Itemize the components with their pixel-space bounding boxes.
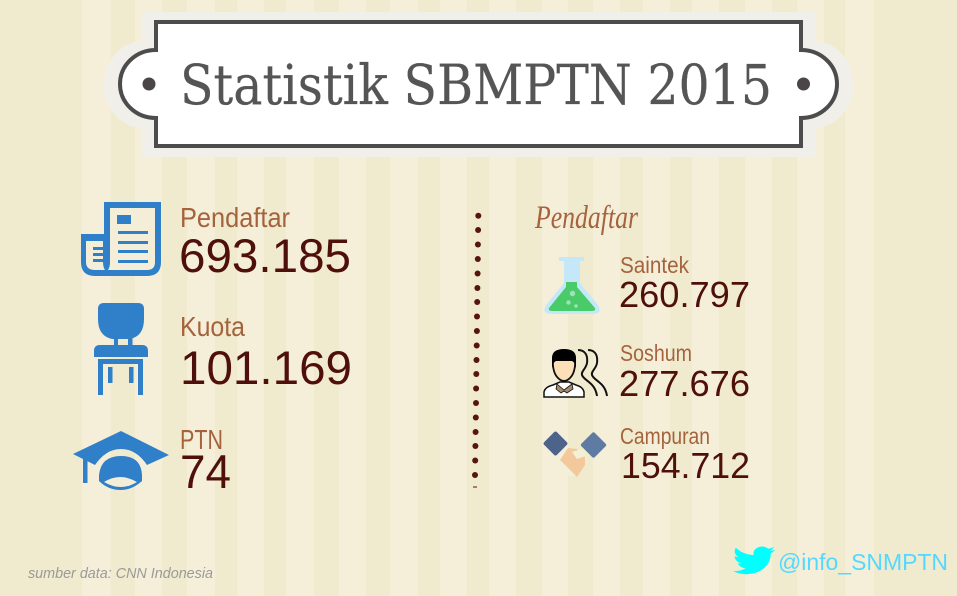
stat: kuota: [94, 303, 352, 395]
number: 260.797: 260.797: [619, 274, 750, 315]
number: 101.169: 101.169: [180, 341, 352, 394]
banner left dot: [142, 78, 156, 90]
number: 693.185: 693.185: [179, 229, 351, 282]
label: Campuran: Campuran: [620, 423, 710, 449]
icon: newspaper: [81, 202, 161, 276]
handwritten heading: Pendaftar: Pendaftar: [534, 200, 638, 236]
icon: graduation cap: [73, 431, 169, 490]
icon: people: [544, 349, 607, 397]
label: Pendaftar: Pendaftar: [180, 202, 290, 233]
label: Saintek: Saintek: [620, 252, 689, 278]
number: 74: 74: [180, 445, 231, 498]
icon: chair: [94, 303, 148, 395]
twitter handle: [733, 546, 948, 575]
title text: Statistik SBMPTN 2015: [180, 53, 772, 117]
icon: handshake: [543, 431, 607, 477]
number: 277.676: 277.676: [619, 363, 750, 404]
label: Soshum: Soshum: [620, 340, 692, 366]
icon: twitter bird: [733, 546, 775, 574]
banner right dot: [797, 78, 810, 90]
label: Kuota: Kuota: [180, 311, 245, 342]
stat: pendaftar: [81, 202, 351, 282]
stat: campuran: [543, 423, 750, 486]
icon: flask: [544, 257, 600, 314]
banner plaque: [120, 22, 837, 146]
dotted divider: [472, 213, 481, 487]
handle text: @info_SNMPTN: [778, 549, 948, 575]
stat: soshum: [544, 340, 750, 404]
label: PTN: PTN: [180, 424, 223, 455]
banner halo: [104, 12, 853, 157]
stat: PTN: [73, 424, 231, 498]
title banner: [104, 12, 853, 157]
number: 154.712: 154.712: [621, 445, 750, 486]
source note: sumber data: CNN Indonesia: [28, 565, 213, 582]
stat: saintek: [544, 252, 750, 315]
